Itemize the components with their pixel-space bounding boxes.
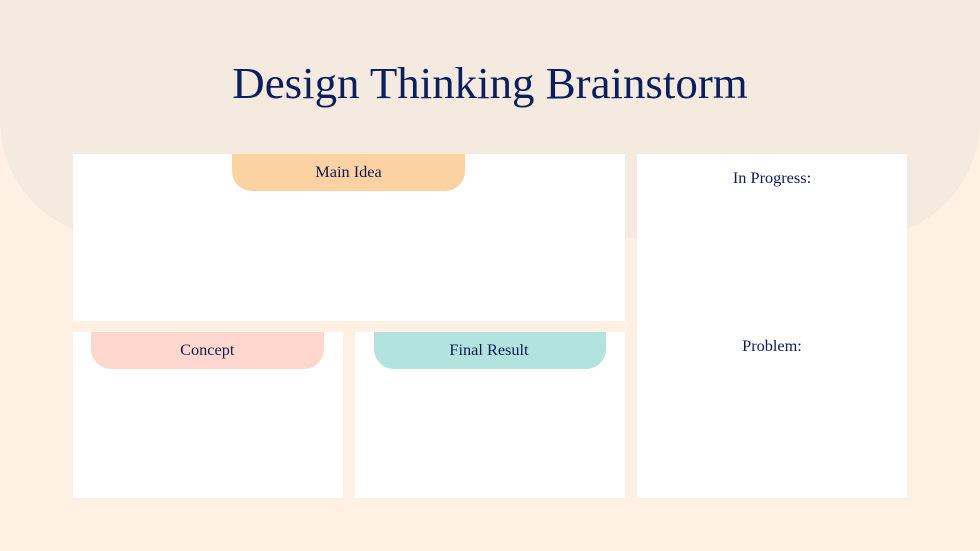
panel: final result: [355, 332, 624, 498]
panel: main idea: [73, 154, 624, 320]
title: Design Thinking Brainstorm: [232, 58, 748, 108]
label: in progress: In Progress:: [733, 168, 811, 187]
label: problem: Problem:: [742, 336, 802, 355]
heading tab: main idea: Main Idea: [315, 162, 382, 181]
heading tab: concept: [91, 332, 324, 369]
heading tab: main idea: [232, 154, 465, 191]
panel: status: [637, 154, 907, 498]
heading tab: final result: Final Result: [449, 340, 529, 359]
heading tab: concept: Concept: [180, 340, 234, 359]
header background shape: [0, 0, 980, 238]
heading tab: final result: [374, 332, 606, 369]
panel: concept: [73, 332, 343, 498]
